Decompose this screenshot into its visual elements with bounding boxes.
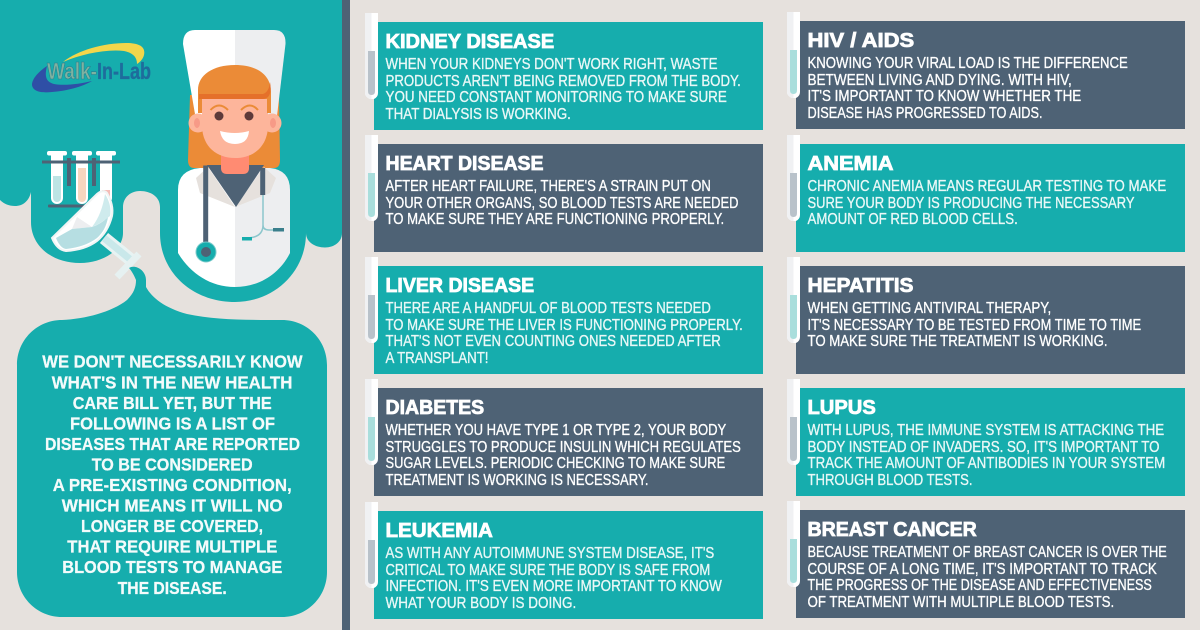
logo: Walk-In-Lab: In-Lab xyxy=(97,58,151,84)
face xyxy=(202,95,268,158)
hair back xyxy=(188,95,280,168)
panel: kidney disease: PRODUCTS AREN'T BEING REMOVED FROM THE BODY. xyxy=(386,73,741,90)
intro text: WHICH MEANS IT WILL NO xyxy=(62,496,283,516)
panel: lupus: THROUGH BLOOD TESTS. xyxy=(808,472,972,489)
intro text: CARE BILL YET, BUT THE xyxy=(73,393,272,413)
logo: Walk-In-Lab: Walk- xyxy=(47,58,97,84)
panel: intro speech bubble xyxy=(17,267,327,617)
shirt xyxy=(207,165,264,207)
intro text: THAT REQUIRE MULTIPLE xyxy=(67,537,277,557)
panel: hepatitis: HEPATITIS xyxy=(808,274,914,297)
intro text xyxy=(42,352,303,598)
ears xyxy=(188,114,208,132)
icon: glass funnel xyxy=(52,191,139,277)
panel: hepatitis: WHEN GETTING ANTIVIRAL THERAPY, xyxy=(808,300,1051,317)
intro text: WE DON'T NECESSARILY KNOW xyxy=(42,352,303,372)
logo: Walk-In-Lab xyxy=(32,43,151,92)
panel: hiv / aids: IT'S IMPORTANT TO KNOW WHETHER THE xyxy=(808,88,1081,105)
panel: breast cancer: OF TREATMENT WITH MULTIPLE BLOOD TESTS. xyxy=(808,594,1114,611)
panel: leukemia: INFECTION. IT'S EVEN MORE IMPORTANT TO KNOW xyxy=(386,578,722,595)
panel: kidney disease: YOU NEED CONSTANT MONITORING TO MAKE SURE xyxy=(386,89,727,106)
panel: heart disease: AFTER HEART FAILURE, THERE'S A STRAIN PUT ON xyxy=(386,178,711,195)
panel: hiv / aids: BETWEEN LIVING AND DYING. WITH HIV, xyxy=(808,72,1072,89)
intro text: TO BE CONSIDERED xyxy=(92,454,253,474)
smile xyxy=(220,131,249,144)
panel: hiv / aids: KNOWING YOUR VIRAL LOAD IS THE DIFFERENCE xyxy=(808,55,1128,72)
panel: kidney disease: KIDNEY DISEASE xyxy=(386,30,554,53)
panel: hepatitis xyxy=(787,257,1185,374)
intro text: DISEASES THAT ARE REPORTED xyxy=(45,434,300,454)
panel: heart disease: TO MAKE SURE THEY ARE FUNCTIONING PROPERLY. xyxy=(386,211,724,228)
intro text: BLOOD TESTS TO MANAGE xyxy=(62,557,282,577)
panel: diabetes: SUGAR LEVELS. PERIODIC CHECKING TO MAKE SURE xyxy=(386,455,725,472)
intro text: A PRE-EXISTING CONDITION, xyxy=(53,475,292,495)
panel: lupus xyxy=(787,379,1185,496)
panel: liver disease: THAT'S NOT EVEN COUNTING ONES NEEDED AFTER xyxy=(386,333,721,350)
panel: heart disease: YOUR OTHER ORGANS, SO BLOOD TESTS ARE NEEDED xyxy=(386,195,738,212)
panel: hepatitis: TO MAKE SURE THE TREATMENT IS WORKING. xyxy=(808,333,1108,350)
panel: liver disease: LIVER DISEASE xyxy=(386,274,534,297)
panel: leukemia: AS WITH ANY AUTOIMMUNE SYSTEM DISEASE, IT'S xyxy=(386,545,714,562)
panel: leukemia xyxy=(365,502,763,619)
intro text: FOLLOWING IS A LIST OF xyxy=(70,413,275,433)
intro text: THE DISEASE. xyxy=(118,578,227,598)
panel: liver disease: A TRANSPLANT! xyxy=(386,350,488,367)
panel: anemia: ANEMIA xyxy=(808,152,894,175)
doctor illustration xyxy=(178,30,290,287)
panel: liver disease: THERE ARE A HANDFUL OF BLOOD TESTS NEEDED xyxy=(386,300,711,317)
panel: hiv / aids xyxy=(787,12,1185,129)
panel: anemia xyxy=(787,135,1185,252)
eyes xyxy=(214,112,224,120)
hair fringe xyxy=(198,65,271,113)
doctor hat xyxy=(183,30,235,120)
panel: hiv / aids: HIV / AIDS xyxy=(808,29,914,52)
panel: heart disease xyxy=(365,135,763,252)
panel: hepatitis: IT'S NECESSARY TO BE TESTED FROM TIME TO TIME xyxy=(808,317,1141,334)
panel: diabetes xyxy=(365,379,763,496)
panel: kidney disease: WHEN YOUR KIDNEYS DON'T WORK RIGHT, WASTE xyxy=(386,56,718,73)
panel: diabetes: DIABETES xyxy=(386,396,484,419)
panel: diabetes: TREATMENT IS WORKING IS NECESSARY. xyxy=(386,472,648,489)
sidebar background with drips xyxy=(0,0,342,302)
divider bar xyxy=(342,0,350,630)
panel: leukemia: CRITICAL TO MAKE SURE THE BODY IS SAFE FROM xyxy=(386,562,710,579)
panel: hiv / aids: DISEASE HAS PROGRESSED TO AIDS. xyxy=(808,105,1042,122)
panel: anemia: SURE YOUR BODY IS PRODUCING THE NECESSARY xyxy=(808,195,1134,212)
panel: anemia: AMOUNT OF RED BLOOD CELLS. xyxy=(808,211,1018,228)
collar xyxy=(196,167,235,207)
panel: liver disease: TO MAKE SURE THE LIVER IS FUNCTIONING PROPERLY. xyxy=(386,317,743,334)
panel: liver disease xyxy=(365,257,763,374)
panel: leukemia: LEUKEMIA xyxy=(386,519,493,542)
panel: kidney disease xyxy=(365,13,763,130)
panel: breast cancer xyxy=(787,501,1185,618)
panel: leukemia: WHAT YOUR BODY IS DOING. xyxy=(386,595,576,612)
panel: diabetes: WHETHER YOU HAVE TYPE 1 OR TYPE 2, YOUR BODY xyxy=(386,422,726,439)
panel: kidney disease: THAT DIALYSIS IS WORKING. xyxy=(386,106,571,123)
panel: heart disease: HEART DISEASE xyxy=(386,152,544,175)
neck xyxy=(221,155,249,174)
panel: lupus: LUPUS xyxy=(808,396,876,419)
intro text: WHAT'S IN THE NEW HEALTH xyxy=(52,372,292,392)
eyebrows xyxy=(210,106,258,110)
panel: breast cancer: BREAST CANCER xyxy=(808,518,977,541)
icon: test tubes in rack xyxy=(42,151,120,208)
intro text: LONGER BE COVERED, xyxy=(81,516,263,536)
panel: breast cancer: COURSE OF A LONG TIME, IT'S IMPORTANT TO TRACK xyxy=(808,561,1157,578)
panel: diabetes: STRUGGLES TO PRODUCE INSULIN WHICH REGULATES xyxy=(386,439,741,456)
doctor coat xyxy=(178,168,235,287)
stethoscope xyxy=(206,168,208,245)
